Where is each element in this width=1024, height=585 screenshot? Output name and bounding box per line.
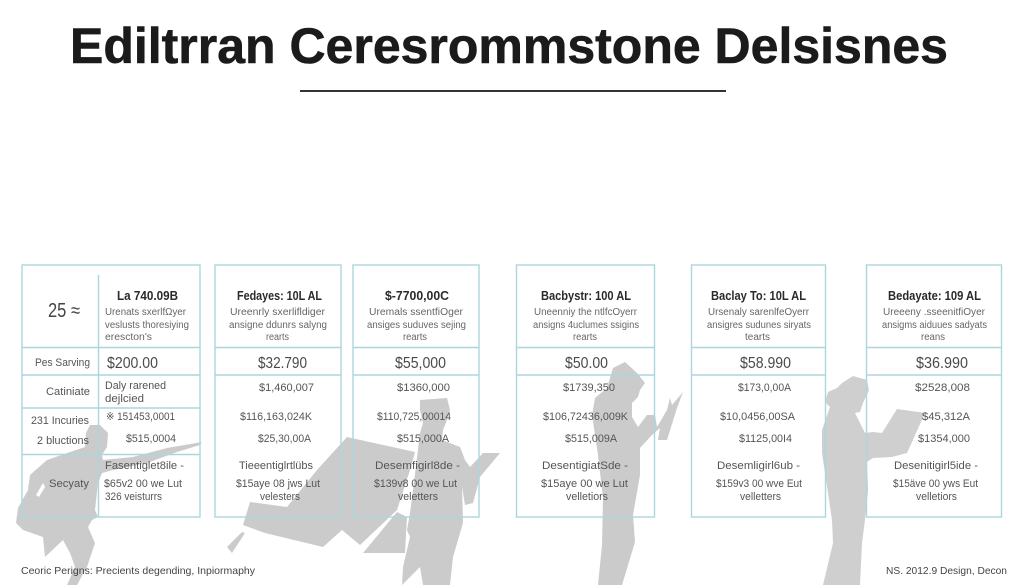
plan description: Ureeeny .sseenitfiOyer — [883, 307, 986, 318]
row labels: Catiniate — [46, 386, 90, 398]
plan heading: Fedayes: 10L AL — [237, 289, 322, 303]
row labels: 2 bluctions — [37, 435, 89, 447]
plan description: Uneenniy the ntlfcOyerr — [534, 307, 638, 318]
plan heading: Bacbystr: 100 AL — [541, 289, 631, 303]
plan description: reans — [921, 332, 945, 343]
plan values: $110,725,00014 — [377, 411, 451, 423]
row labels: Secyaty — [49, 478, 89, 490]
panel: plan 6 — [866, 265, 1002, 517]
plan values: $15aye 00 we Lut — [541, 478, 628, 490]
plan description: erescton's — [105, 332, 152, 343]
title: Ediltrran Ceresrommstone Delsisnes — [70, 18, 948, 74]
silhouette: person with laptop — [822, 376, 925, 585]
plan values: Desenitigirl5ide - — [894, 460, 978, 472]
silhouette: running person — [16, 425, 202, 585]
plan description: tearts — [745, 332, 770, 343]
plan values: Daly rarened — [105, 380, 166, 392]
plan values: $15aye 08 jws Lut — [236, 478, 320, 490]
plan values: $45,312A — [922, 411, 971, 423]
plan description: veslusts thoresiying — [105, 320, 189, 331]
plan values: $173,0,00A — [738, 382, 792, 394]
plan values: $15äve 00 yws Eut — [893, 478, 978, 490]
plan values: veletters — [398, 491, 438, 503]
plan values: $515,0004 — [126, 433, 176, 445]
price: $50.00 — [565, 355, 608, 372]
plan values: $116,163,024K — [240, 411, 313, 423]
panel: plan 4 — [516, 265, 654, 517]
plan values: $515,009A — [565, 433, 618, 445]
plan description: Ursenaly sarenlfeOyerr — [708, 307, 810, 318]
plan heading: La 740.09B — [117, 289, 178, 303]
plan description: rearts — [573, 332, 597, 343]
silhouette: person carrying a box — [227, 398, 500, 585]
plan values: $106,72436,009K — [543, 411, 629, 423]
price: $32.790 — [258, 355, 307, 372]
plan values: velletiors — [916, 491, 957, 503]
plan values: $1739,350 — [563, 382, 615, 394]
row labels: Pes Sarving — [35, 357, 90, 369]
row count: 25 ≈ — [48, 300, 80, 322]
panel: plan 2 — [215, 265, 341, 517]
price: $36.990 — [916, 355, 968, 372]
panel: row labels and first plan — [22, 265, 200, 517]
row labels: 231 Incuries — [31, 415, 89, 427]
plan values: Desemligirl6ub - — [717, 460, 800, 472]
plan values: $65v2 00 we Lut — [104, 478, 182, 490]
plan values: $1125,00I4 — [739, 433, 792, 445]
plan values: $515,000A — [397, 433, 450, 445]
plan description: ansigms aiduues sadyats — [882, 320, 987, 331]
silhouette: person reading a tablet — [592, 362, 683, 585]
plan values: $139v8 00 we Lut — [374, 478, 457, 490]
plan values: Tieeentiglrtlübs — [239, 460, 313, 472]
plan values: velletiors — [566, 491, 608, 503]
plan description: ansigns 4uclumes ssigins — [533, 320, 639, 331]
plan values: $2528,008 — [915, 382, 970, 394]
plan description: ansigres sudunes siryats — [707, 320, 811, 331]
price: $200.00 — [107, 355, 158, 372]
plan description: Urenats sxerlfΩyer — [105, 307, 187, 318]
footer left: Ceoric Perigns: Precients degending, Inpiormaphy — [21, 565, 256, 577]
plan values: Desemfigirl8de - — [375, 460, 460, 472]
plan values: DesentigiatSde - — [542, 460, 628, 472]
plan values: Fasentiglet8ile - — [105, 460, 184, 472]
plan values: $1360,000 — [397, 382, 450, 394]
plan values: 326 veisturrs — [105, 491, 162, 503]
plan heading: Baclay To: 10L AL — [711, 289, 806, 303]
plan values: ※ 151453,0001 — [106, 411, 175, 423]
plan heading: $-7700,00C — [385, 289, 449, 303]
plan values: dejlcied — [105, 393, 144, 405]
plan description: Uremals ssentfiOger — [369, 307, 464, 318]
plan description: ansiges suduves sejing — [367, 320, 466, 331]
footer right: NS. 2012.9 Design, Decon — [886, 565, 1007, 577]
plan values: $1,460,007 — [259, 382, 314, 394]
plan description: Ureenrly sxerlifldiger — [230, 307, 326, 318]
plan values: velesters — [260, 491, 300, 503]
panel: plan 3 — [353, 265, 479, 517]
plan values: $10,0456,00SA — [720, 411, 796, 423]
plan values: velletters — [740, 491, 781, 503]
title underline — [300, 90, 726, 92]
panel: plan 5 — [692, 265, 826, 517]
plan description: rearts — [403, 332, 427, 343]
plan description: ansigne ddunrs salyng — [229, 320, 327, 331]
plan description: rearts — [266, 332, 289, 343]
plan values: $1354,000 — [918, 433, 970, 445]
plan values: $25,30,00A — [258, 433, 312, 445]
plan heading: Bedayate: 109 AL — [888, 289, 981, 303]
plan values: $159v3 00 wve Eut — [716, 478, 802, 490]
price: $58.990 — [740, 355, 791, 372]
price: $55,000 — [395, 355, 446, 372]
